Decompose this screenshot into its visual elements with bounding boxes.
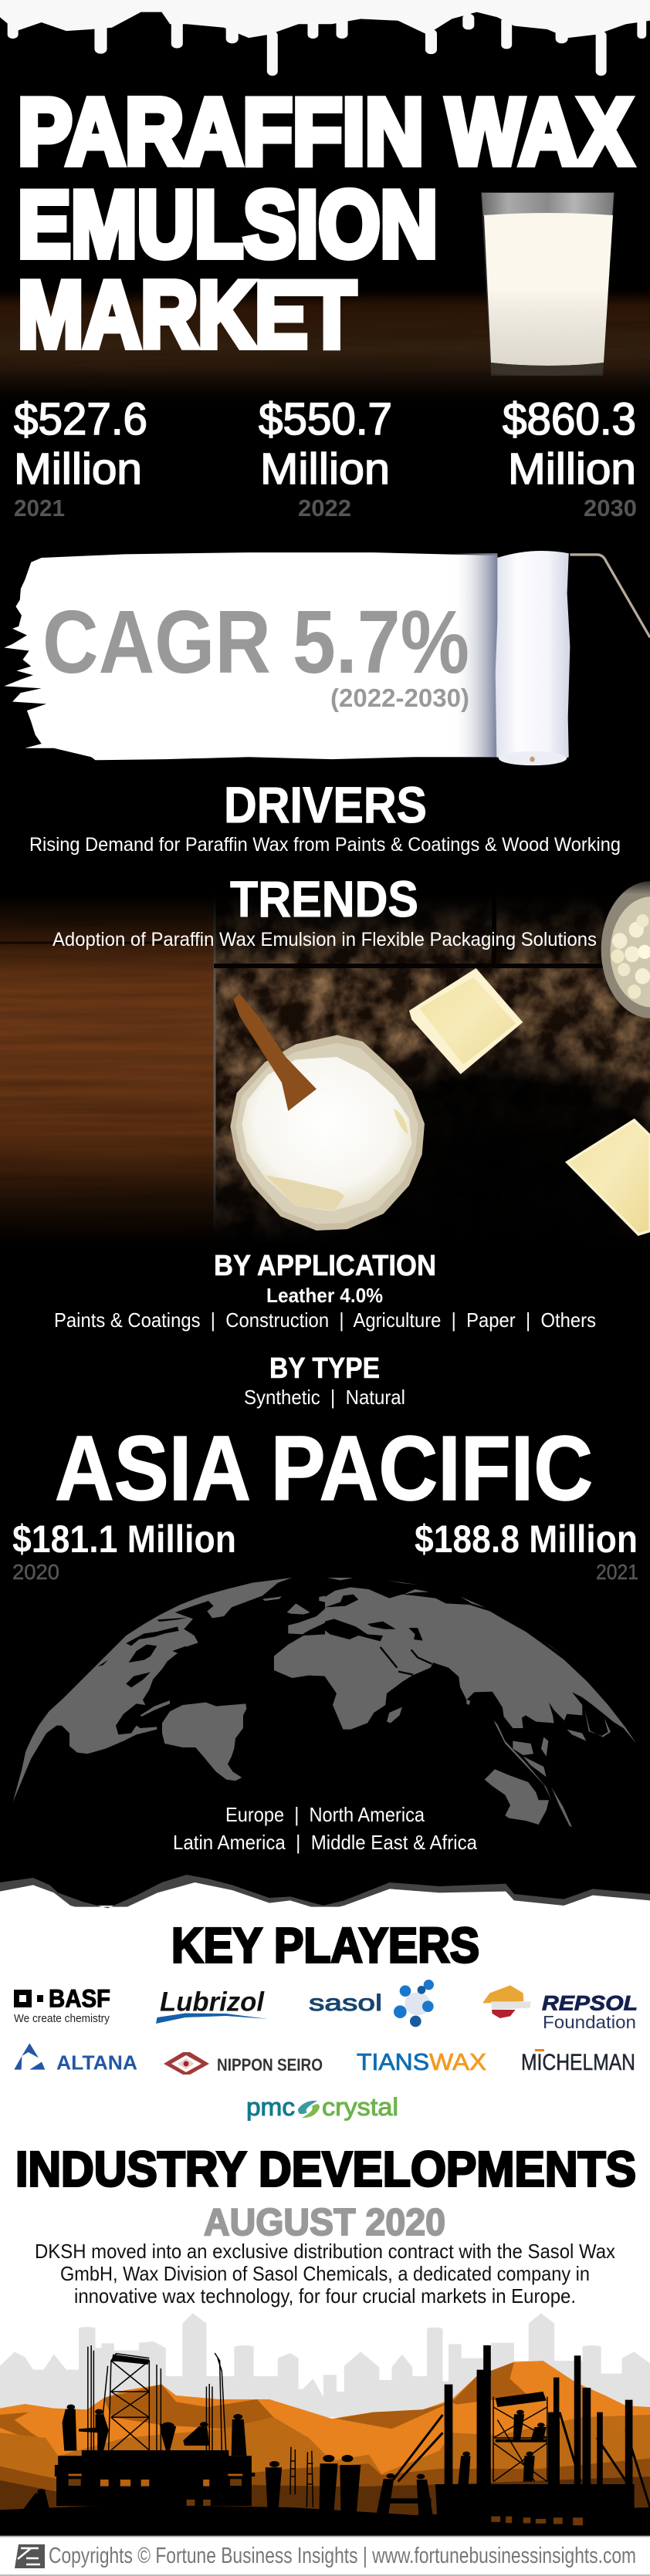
darker mountain shades	[0, 2362, 535, 2470]
text: development description: GmbH, Wax Division of Sasol Chemicals, a dedicated company in	[60, 2262, 590, 2285]
stat: 2021: Million	[14, 444, 142, 494]
logo: Repsol Foundation	[483, 1985, 638, 2032]
stat: 2030	[503, 394, 637, 522]
icon: wax block bottom	[567, 1120, 650, 1234]
logo: Tianswax: TIANS	[357, 2048, 429, 2075]
panel: CAGR paint stroke: (2022-2030)	[330, 684, 469, 712]
title: MARKET	[18, 262, 356, 367]
ground	[0, 2505, 650, 2536]
heading: by type: BY TYPE	[269, 1352, 380, 1385]
wooden table behind glass	[0, 289, 650, 409]
heading: august 2020: AUGUST 2020	[204, 2202, 445, 2243]
torn paper edge	[0, 1875, 650, 2576]
workers on ground	[23, 2410, 547, 2520]
icon: bowl of wax pellets	[581, 874, 650, 1018]
workers on platform	[63, 2405, 247, 2456]
logo: BASF: We create chemistry	[14, 2012, 110, 2025]
white wax drips	[0, 0, 650, 76]
icon: wax block top	[409, 968, 523, 1074]
heading: key players: KEY PLAYERS	[171, 1918, 479, 1973]
text: development description: innovative wax technology, for four crucial markets in Europe.	[74, 2284, 576, 2308]
logo: Tianswax	[357, 2048, 486, 2075]
text: leather share: Leather 4.0%	[266, 1284, 383, 1307]
stat: 2021: 2021	[14, 495, 65, 522]
text: other regions	[173, 1803, 477, 1854]
logo: PMC Crystal: crystal	[322, 2093, 398, 2121]
stat: 2021	[14, 394, 147, 522]
logo: Altana	[14, 2043, 137, 2074]
stat: 2030: Million	[508, 444, 636, 494]
panel: CAGR paint stroke	[4, 551, 650, 765]
scaffolding and rebar	[88, 2345, 547, 2507]
stat: asia pacific 2020: 2020	[12, 1560, 59, 1584]
illustration: construction scene	[0, 2313, 650, 2536]
title: EMULSION	[18, 171, 438, 276]
logo: Repsol Foundation: Foundation	[543, 2012, 636, 2032]
stat: 2030: 2030	[584, 495, 637, 522]
icon: cream bowl with wooden spoon	[230, 994, 425, 1231]
heading: trends: TRENDS	[230, 870, 418, 927]
logo: PMC Crystal	[246, 2093, 398, 2121]
stat: 2022: 2022	[298, 495, 351, 522]
text: type list: Synthetic | Natural	[244, 1386, 405, 1409]
stat: asia pacific 2021	[415, 1518, 638, 1584]
page background	[0, 0, 650, 1906]
logo: Altana: ALTANA	[56, 2051, 137, 2074]
logo: BASF: BASF	[49, 1984, 110, 2012]
city skyline	[0, 2313, 650, 2417]
text: other regions: Latin America | Middle East & Africa	[173, 1831, 477, 1854]
logo: Nippon Seiro: NIPPON SEIRO	[217, 2055, 323, 2075]
stat: 2022: Million	[260, 444, 390, 494]
stat: 2021: $527.6	[14, 394, 147, 444]
footer bar	[0, 2536, 650, 2576]
title	[18, 79, 632, 367]
panel: CAGR paint stroke: CAGR 5.7%	[42, 592, 469, 692]
text: development description: DKSH moved into an exclusive distribution contract with the Sasol Wax	[35, 2240, 615, 2263]
logo: sasol: sasol	[309, 1990, 382, 2016]
heading: drivers: DRIVERS	[224, 776, 427, 833]
left platform	[55, 2450, 255, 2506]
text: other regions: Europe | North America	[225, 1803, 425, 1826]
orange mountains	[0, 2361, 650, 2536]
text: application list: Paints & Coatings | Construction | Agriculture | Paper | Others	[54, 1308, 596, 1332]
stat: 2030: $860.3	[503, 394, 636, 444]
stat: asia pacific 2020: $181.1 Million	[12, 1518, 236, 1561]
stat: 2022: $550.7	[259, 394, 392, 444]
heading: by application: BY APPLICATION	[214, 1250, 436, 1282]
logo: Lubrizol: Lubrizol	[160, 1987, 265, 2017]
stat: asia pacific 2020	[12, 1518, 236, 1584]
text: drivers description: Rising Demand for Paraffin Wax from Paints & Coatings & Wood Working	[29, 834, 621, 856]
logo: Nippon Seiro	[164, 2052, 323, 2075]
right structure columns	[435, 2345, 635, 2520]
stat: 2022	[259, 394, 392, 522]
world map globe	[13, 1578, 636, 1827]
panel: wax photo background	[0, 868, 650, 1296]
text: development description	[35, 2240, 615, 2308]
logo: Tianswax: WAX	[429, 2048, 486, 2075]
text: trends description: Adoption of Paraffin Wax Emulsion in Flexible Packaging Solutions	[52, 929, 597, 950]
heading: asia pacific: ASIA PACIFIC	[55, 1417, 593, 1520]
icon: glass of milk	[481, 192, 614, 376]
stat: asia pacific 2021: 2021	[596, 1560, 638, 1584]
logo: BASF	[14, 1984, 110, 2025]
icon: Fortune Business Insights logo	[15, 2544, 45, 2568]
logo: sasol	[309, 1980, 434, 2027]
logo: PMC Crystal: pmc	[246, 2093, 295, 2121]
logo: Repsol Foundation: REPSOL	[542, 1992, 638, 2015]
